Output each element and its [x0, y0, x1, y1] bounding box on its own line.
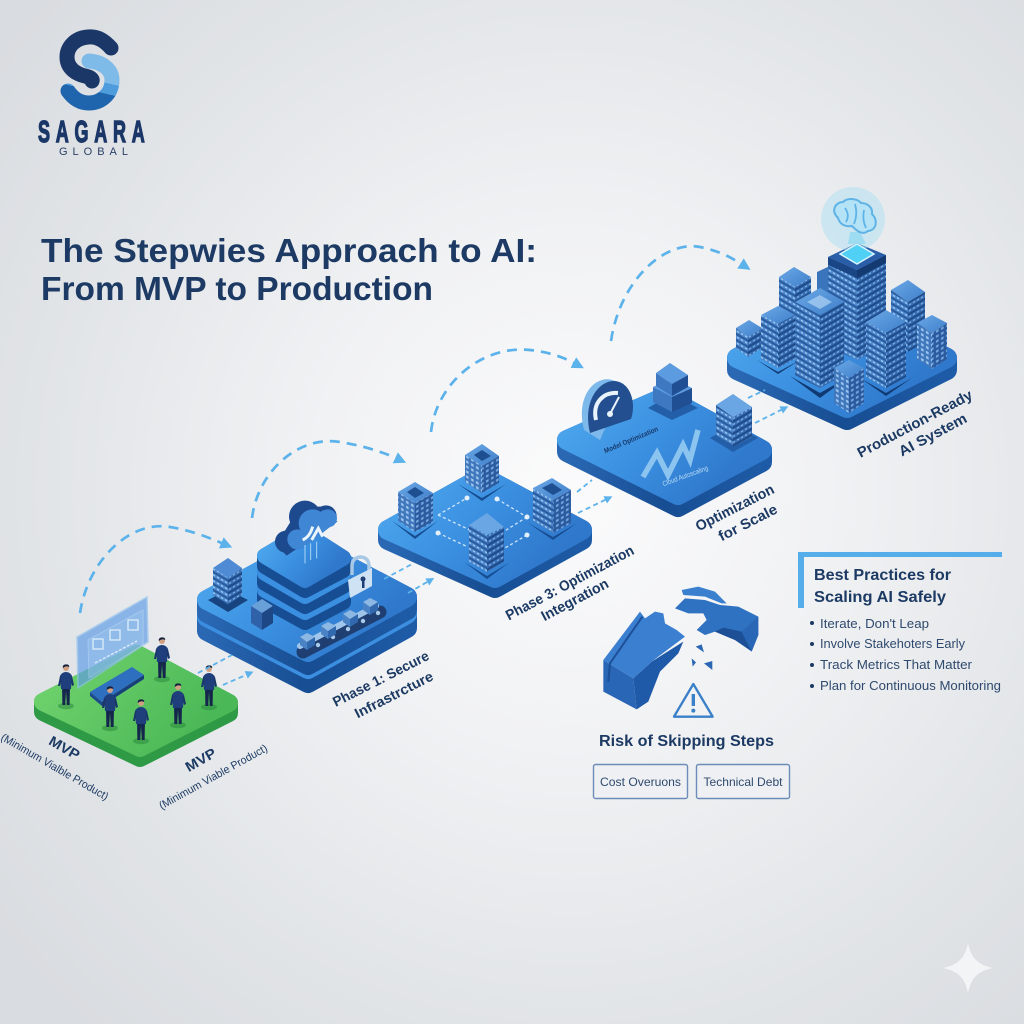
icon: broken bridge	[603, 587, 758, 709]
tag: cost overruns: Cost Overuons	[600, 775, 681, 789]
accent bracket	[798, 552, 1002, 608]
label: MVP right: MVP	[182, 744, 219, 775]
panel: optimization for scale	[567, 363, 762, 507]
network nodes	[436, 496, 530, 538]
label: MVP left: (Minimum Vialble Product)	[0, 732, 110, 803]
building: left	[392, 482, 438, 539]
icon: server stack	[710, 394, 758, 452]
logo wordmark: SAGARA	[38, 115, 145, 149]
platform: lower layer	[207, 562, 407, 683]
tag: technical debt: Technical Debt	[704, 775, 783, 789]
logo: Sagara Global	[38, 37, 145, 158]
building: main tower	[817, 243, 886, 360]
label: production-ready AI system: AI System	[896, 411, 970, 460]
label: MVP right: (Minimum Viable Product)	[157, 743, 270, 812]
conveyor belt	[300, 598, 380, 652]
small cube	[251, 599, 273, 630]
logo subtitle: GLOBAL	[59, 146, 128, 158]
platform: production base	[737, 303, 947, 420]
platform: green base	[43, 654, 229, 758]
heading: best practices: Scaling AI Safely	[814, 589, 946, 606]
title: From MVP to Production	[41, 270, 433, 307]
building: top	[458, 444, 506, 501]
label: phase 1: Infrastrcture	[352, 668, 436, 721]
icon: speed gauge	[582, 379, 633, 440]
icon: AI brain hologram over chip	[821, 187, 885, 264]
label: phase 3: Phase 3: Optimization	[503, 543, 637, 624]
server rack	[208, 558, 248, 612]
panel: best practices	[798, 552, 1002, 693]
icon: cloud	[275, 501, 337, 563]
building: small front	[834, 360, 864, 413]
building: front server	[464, 513, 510, 579]
icon: S mark	[67, 37, 112, 103]
icon: stacked storage boxes	[648, 363, 698, 420]
panel: phase 1 secure infrastructure	[207, 501, 407, 683]
panel: production-ready AI system	[736, 187, 947, 420]
arrows: short dashed connectors between phases	[198, 390, 783, 685]
bullet list: Track Metrics That Matter	[820, 658, 972, 672]
label: optimization for scale: for Scale	[716, 502, 780, 545]
holographic screen	[77, 597, 148, 688]
label: phase 1: Phase 1: Secure	[330, 647, 432, 710]
bullet list: Iterate, Don't Leap	[820, 617, 929, 631]
label: MVP left: MVP	[46, 732, 83, 763]
building: rear right	[891, 280, 925, 352]
panel: risk of skipping steps	[594, 587, 790, 798]
label: production-ready AI system: Production-Ready	[855, 387, 975, 462]
panel: MVP team platform	[43, 597, 229, 758]
bullet list: Involve Stakehoters Early	[820, 637, 966, 651]
chart: performance line	[643, 430, 698, 477]
building: rear left	[779, 267, 811, 332]
bullet list	[810, 617, 1001, 693]
table	[90, 667, 144, 706]
heading: best practices: Best Practices for	[814, 567, 951, 584]
building: far left	[736, 320, 762, 357]
building: right mid	[860, 310, 912, 396]
platform: upper layer	[207, 545, 407, 665]
bullet list: Plan for Continuous Monitoring	[820, 679, 1001, 693]
label: phase 3: Integration	[539, 576, 612, 625]
text: cloud autoscaling: Cloud Autoscaling	[662, 465, 709, 488]
tag: technical debt	[696, 764, 790, 798]
text: model optimization: Model Optimization	[603, 426, 659, 455]
stacked tiers	[265, 533, 343, 622]
panel: phase 3 integration	[388, 444, 582, 588]
heading: best practices	[814, 567, 951, 606]
arrows: dashed curved progress arrows	[80, 246, 743, 613]
icon: sparkle	[943, 943, 993, 993]
building: far right	[917, 315, 947, 369]
icon: warning triangle	[674, 684, 713, 717]
building: right	[528, 478, 577, 540]
team members	[58, 637, 217, 744]
tag: cost overruns	[594, 764, 688, 798]
title	[41, 232, 537, 307]
heading: risk: Risk of Skipping Steps	[599, 733, 774, 750]
title: The Stepwies Approach to AI:	[41, 232, 537, 269]
building: left mid	[757, 306, 800, 374]
building: big front	[790, 288, 850, 398]
label: optimization for scale: Optimization	[693, 482, 777, 535]
platform: integration base	[388, 477, 582, 588]
network links	[438, 498, 527, 548]
platform: optimization base	[567, 397, 762, 507]
icon: padlock	[348, 557, 372, 598]
